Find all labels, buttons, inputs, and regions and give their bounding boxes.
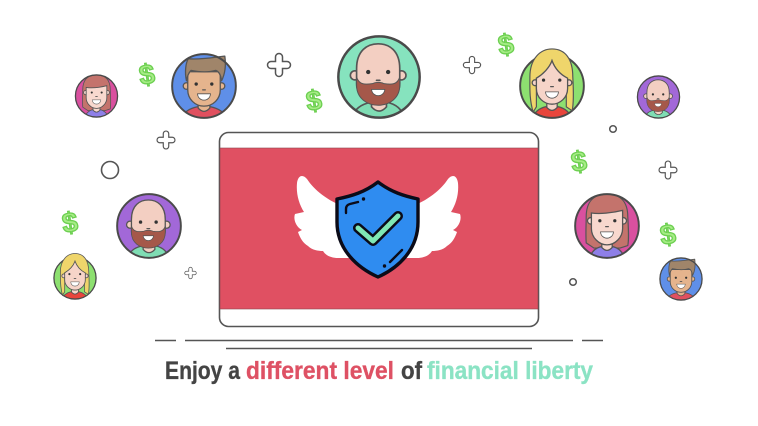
icon: dollar signs: $: [658, 218, 678, 251]
icon: dollar signs: $: [569, 145, 589, 178]
laptop screen frame: [220, 132, 538, 326]
avatar: small woman on pink: [75, 75, 118, 118]
avatar: bald man on purple: [117, 194, 181, 258]
icon: dollar signs: $: [60, 206, 80, 239]
icon: white wings: [294, 176, 461, 258]
title: enjoy a different level of financial liberty: of: [401, 357, 423, 385]
avatar: large bald man on green: [338, 36, 420, 118]
title: enjoy a different level of financial liberty: [165, 357, 593, 385]
icon: small circles: [102, 126, 616, 285]
icon: blue shield with check mark: [337, 182, 418, 277]
avatar: small blonde woman on green: [54, 253, 96, 300]
avatar: small man on blue: [660, 258, 702, 300]
avatar: man on blue: [172, 54, 236, 119]
icon: dollar signs: $: [496, 28, 516, 61]
avatar: blonde woman on green: [520, 49, 584, 118]
icon: dollar signs: $: [304, 84, 324, 117]
icon: dollar signs: [60, 28, 678, 251]
red screen panel: [220, 148, 538, 309]
avatar: woman on pink: [575, 194, 639, 258]
icon: dollar signs: $: [137, 58, 157, 91]
title: enjoy a different level of financial liberty: Enjoy a: [165, 357, 241, 385]
title: enjoy a different level of financial liberty: financial liberty: [427, 357, 593, 385]
avatar: small bald man on purple: [637, 76, 680, 118]
title: enjoy a different level of financial liberty: different level: [246, 357, 394, 385]
icon: plus signs: [160, 57, 674, 277]
